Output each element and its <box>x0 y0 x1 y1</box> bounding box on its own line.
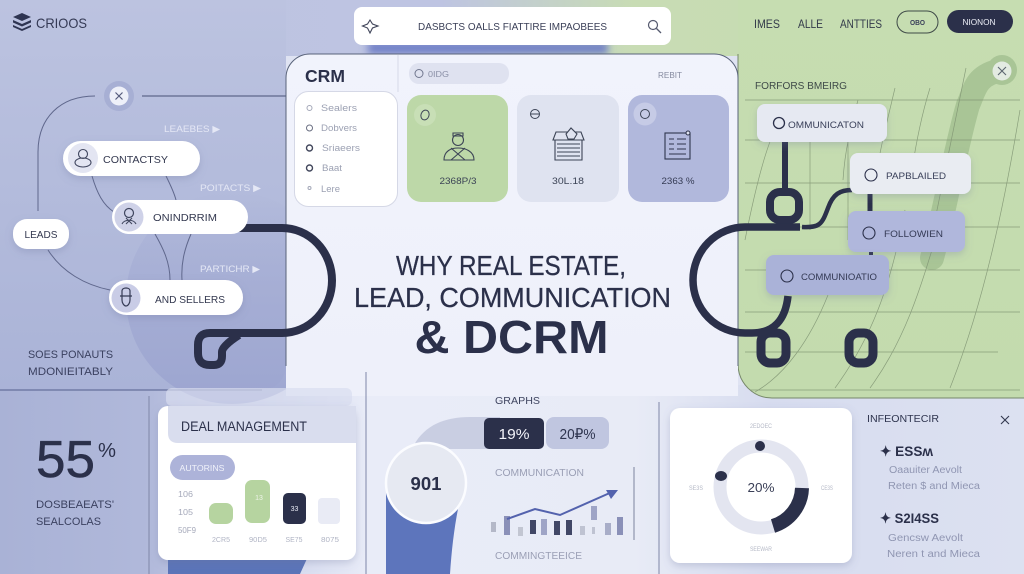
outline button: OBO <box>910 20 926 27</box>
item: s2i4ss: Gencsw Aevolt <box>888 533 963 544</box>
sidebar list: Sealers <box>321 103 358 113</box>
and sellers pill <box>109 280 243 315</box>
grid <box>745 68 1020 392</box>
contacts pill <box>63 141 200 176</box>
card: green agent <box>407 95 508 202</box>
label: comminteeice: COMMINGTEEICE <box>495 551 582 562</box>
bar chart: 90D5 <box>249 535 267 544</box>
leads pill <box>13 219 69 249</box>
logo <box>13 13 87 31</box>
donut: 20% <box>748 480 775 495</box>
label: poitacts: POITACTS ▶ <box>200 183 262 194</box>
sidebar list: Baat <box>322 163 343 173</box>
donut <box>715 441 802 528</box>
item: essw: Reten $ and Mieca <box>888 481 980 492</box>
line chart <box>491 467 634 540</box>
panel: information list <box>867 413 1009 560</box>
donut labels: 2EDOEC <box>750 423 772 430</box>
contacts pill: CONTACTSY <box>103 154 168 166</box>
top bar <box>13 7 1013 45</box>
arc shape <box>414 417 500 449</box>
donut labels <box>689 423 833 553</box>
light tab: 20₽% <box>560 426 596 443</box>
main title: LEAD, COMMUNICATION <box>354 282 671 313</box>
heading: GRAPHS <box>495 395 540 407</box>
sidebar list: Sriaeers <box>322 143 361 153</box>
item: s2i4ss: ✦ S2I4SS <box>880 510 939 526</box>
card: green agent: 2368P/3 <box>440 176 476 186</box>
sweep band <box>932 70 1002 258</box>
box: communication: OMMUNICATON <box>788 120 864 131</box>
leads pill: LEADS <box>24 229 58 241</box>
filter pill: 0IDG <box>428 70 449 79</box>
bar chart: 13 <box>255 495 263 502</box>
panel: leads network <box>0 0 338 404</box>
main title: & DCRM <box>414 311 608 363</box>
donut labels: CE3S <box>821 485 833 492</box>
lavender blob <box>126 192 338 404</box>
onindrim pill <box>112 200 248 234</box>
main title <box>354 250 671 363</box>
bar chart: 33 <box>291 506 298 513</box>
donut labels: SE3S <box>689 485 704 492</box>
item: essw: ✦ ESSʍ <box>880 443 933 459</box>
navigation <box>754 17 882 31</box>
card: lavender report <box>628 95 729 202</box>
panel: donut chart <box>670 408 852 563</box>
donut labels: SEEWAR <box>750 546 772 553</box>
panel: communication flow <box>738 0 1024 398</box>
stat: 55%: 55 <box>36 431 95 489</box>
dark button: NIONON <box>962 17 996 27</box>
caption: MDONIEITABLY <box>28 366 114 378</box>
label: rebit: REBIT <box>658 71 682 80</box>
dark tab: 19% <box>498 426 530 443</box>
onindrim pill: ONINDRRIM <box>153 212 217 224</box>
stat: 55%: DOSBEAEATS' <box>36 499 114 511</box>
panel: deal management <box>158 388 356 574</box>
metric circle <box>386 443 466 523</box>
pill: AUTORINS <box>180 463 225 473</box>
heading: FORFORS BMEIRG <box>755 81 847 92</box>
blue wave <box>386 490 462 574</box>
navigation: ALLE <box>798 17 823 31</box>
bar chart: 105 <box>178 508 194 517</box>
search glow <box>368 42 608 54</box>
box: followien <box>848 211 965 252</box>
card: grey box: 30L.18 <box>552 176 584 186</box>
label: partichr: PARTICHR ▶ <box>200 264 261 275</box>
box: followien: FOLLOWIEN <box>884 229 943 240</box>
box: communioatio <box>766 255 889 295</box>
crm title: CRM <box>305 66 345 86</box>
navigation: IMES <box>754 17 780 31</box>
bar chart: 8075 <box>321 535 339 544</box>
panel: graphs <box>386 395 634 574</box>
box: communication <box>757 104 887 142</box>
item: essw <box>880 443 980 492</box>
outline button <box>897 11 938 33</box>
connector: right dark loop <box>693 227 800 333</box>
sidebar list: Dobvers <box>321 123 358 133</box>
close button <box>987 55 1017 85</box>
main title: WHY REAL ESTATE, <box>396 250 626 281</box>
item: s2i4ss <box>880 510 980 560</box>
dark connectors <box>761 142 873 363</box>
filter pill <box>409 63 509 84</box>
bar chart: 106 <box>178 490 194 499</box>
metric circle: 901 <box>410 474 442 494</box>
and sellers pill: AND SELLERS <box>155 294 225 306</box>
pill <box>170 455 235 480</box>
bar chart: 2CR5 <box>212 535 230 544</box>
box: papblailed <box>850 153 971 194</box>
icon: close node <box>104 81 134 111</box>
card: grey box <box>517 95 619 202</box>
navigation: ANTTIES <box>840 17 882 31</box>
heading: INFEONTECIR <box>867 413 939 425</box>
stat: 55%: % <box>98 440 116 462</box>
heading: DEAL MANAGEMENT <box>181 419 307 434</box>
card: lavender report: 2363 % <box>662 176 694 186</box>
box: papblailed: PAPBLAILED <box>886 171 946 182</box>
stat: 55%: SEALCOLAS <box>36 516 101 528</box>
dark tab <box>484 418 544 449</box>
item: essw: Oaauiter Aevolt <box>889 465 962 476</box>
connector: left dark loop <box>198 228 332 365</box>
bar chart: SE75 <box>286 535 302 544</box>
panel: crm dashboard <box>286 54 738 396</box>
box: communioatio: COMMUNIOATIO <box>801 272 877 283</box>
sidebar list <box>294 92 398 206</box>
icon: close <box>1001 416 1009 424</box>
connector lines <box>38 96 286 290</box>
light tab <box>546 417 609 449</box>
label: communication: COMMUNICATION <box>495 468 584 479</box>
dark button <box>947 10 1013 33</box>
sidebar list: Lere <box>321 184 340 194</box>
item: s2i4ss: Neren t and Mieca <box>887 549 980 560</box>
search bar: DASBCTS OALLS FIATTIRE IMPAOBEES <box>418 21 607 33</box>
stat: 55% <box>36 431 116 528</box>
bar chart: 50F9 <box>178 526 197 535</box>
divider lines <box>149 372 659 574</box>
search bar <box>354 7 671 45</box>
logo: CRIOOS <box>36 15 87 31</box>
caption <box>28 349 114 378</box>
label: leaebes: LEAEBES ▶ <box>164 124 221 135</box>
caption: SOES PONAUTS <box>28 349 113 361</box>
bar chart <box>178 480 340 544</box>
